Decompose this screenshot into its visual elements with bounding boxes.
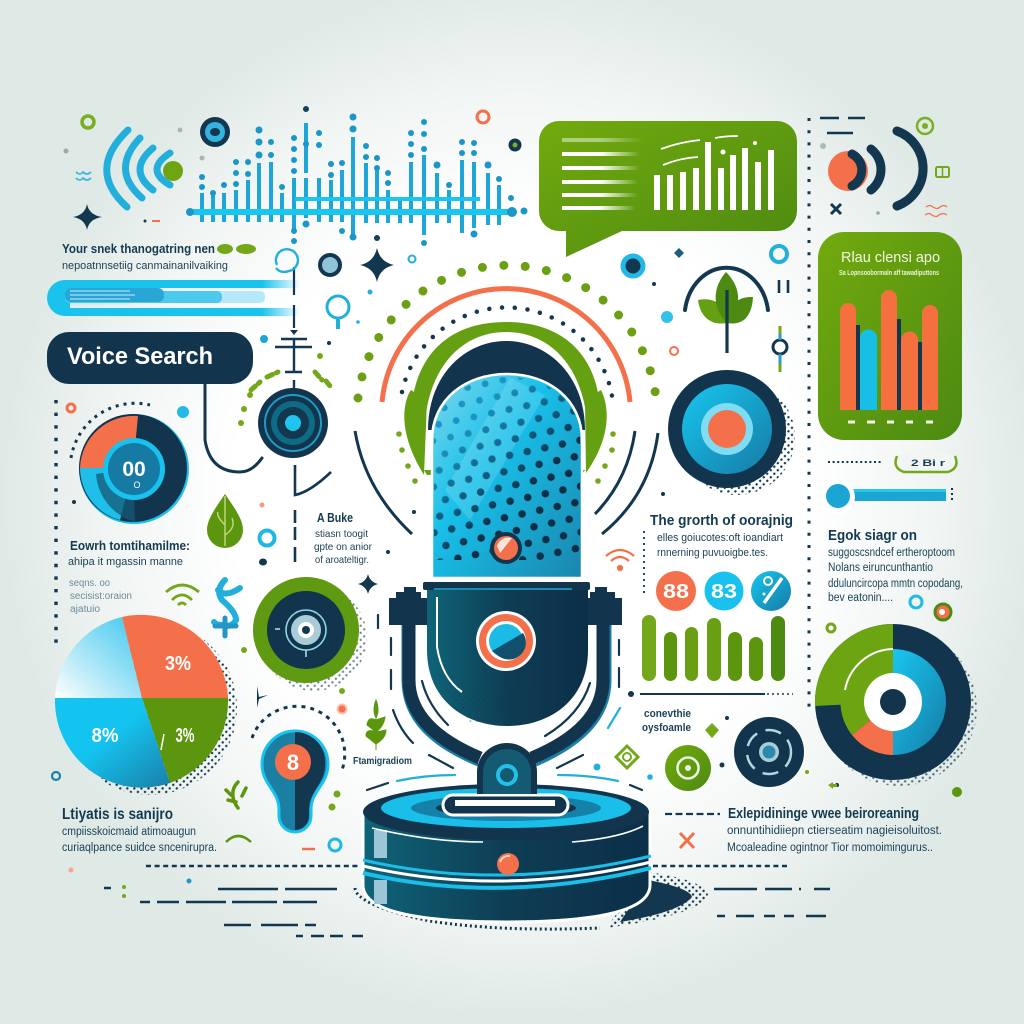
text block: lower right: Mcoaleadine ogintnor Tior momoimingurus.. bbox=[727, 842, 933, 854]
panel: green bar chart bbox=[818, 232, 962, 440]
pie chart bbox=[55, 615, 237, 795]
green crescent bbox=[411, 322, 600, 475]
mic head bbox=[432, 374, 582, 578]
stat circles: 83 bbox=[711, 581, 737, 603]
base plate bbox=[443, 795, 568, 815]
sound arcs bbox=[355, 265, 658, 534]
text block: A Buke: A Buke bbox=[317, 510, 353, 525]
green bar chart bbox=[628, 615, 793, 697]
microphone bbox=[355, 265, 708, 929]
text block: intro: nepoatnnsetiig canmainanilvaiking bbox=[62, 260, 228, 272]
text block: left: ajatuio bbox=[70, 604, 100, 615]
icon: navy sound waves with orange dot bbox=[820, 118, 949, 216]
text block: growth: elles goiucotes:oft ioandiart bbox=[657, 532, 783, 544]
decorative top left icons bbox=[64, 111, 522, 230]
text block: right: dduluncircopa mmtn copodang, bbox=[828, 578, 963, 590]
connector lines and central target bbox=[205, 267, 331, 562]
keyhole badge with number bbox=[252, 706, 345, 832]
text block: left: ahipa it mgassin manne bbox=[68, 556, 183, 568]
text block: left bbox=[68, 538, 190, 615]
body button bbox=[476, 611, 536, 671]
dotted base outline bbox=[355, 888, 600, 929]
dark dome bbox=[428, 341, 585, 430]
small icons around lower left bbox=[52, 686, 346, 898]
icon: plant with label: Ftamigradiom bbox=[353, 755, 412, 767]
text block: lower left bbox=[62, 806, 217, 854]
text block: lower right bbox=[653, 806, 942, 916]
text block: intro bbox=[62, 241, 256, 272]
heading: Voice Search: Voice Search bbox=[67, 343, 213, 370]
speech bubble with bar chart bbox=[539, 121, 797, 257]
text block: intro: Your snek thanogatring nen bbox=[62, 241, 215, 256]
text block: right: suggoscsndcef ertheroptoom bbox=[828, 547, 955, 559]
text block: left: secisist:oraion bbox=[70, 591, 132, 602]
lower middle labels and icons: oysfoamle bbox=[642, 722, 691, 734]
collar bbox=[423, 582, 590, 590]
stat circles bbox=[656, 571, 791, 611]
text block: growth bbox=[644, 512, 793, 597]
base bbox=[363, 812, 650, 922]
knob bbox=[477, 743, 537, 794]
heading: Voice Search bbox=[47, 332, 253, 384]
panel: green bar chart: Sa Lopnsoobormaln aff tawadiputtons bbox=[839, 270, 939, 277]
motion strokes bbox=[367, 615, 642, 790]
mic body bbox=[427, 590, 588, 726]
dotted vertical divider bbox=[808, 118, 810, 708]
dotted vertical rule bbox=[54, 400, 58, 648]
text block: right: Nolans eiruncunthantio bbox=[828, 562, 933, 574]
pie chart: 8% bbox=[92, 725, 119, 747]
text block: growth: The grorth of oorajnig bbox=[650, 512, 793, 529]
text block: growth: rnnerning puvuoigbe.tes. bbox=[657, 547, 768, 559]
donut chart: right bbox=[805, 596, 977, 797]
text block: lower right: onnuntihidiiepn ctierseatim nagieisoluitost. bbox=[727, 825, 942, 837]
text block: A Buke: of aroateltigr. bbox=[315, 554, 369, 566]
small icons around leaf bbox=[623, 246, 787, 496]
label pill and slider: 2 Bi r bbox=[911, 458, 946, 468]
text block: lower left: Ltiyatis is sanijro bbox=[62, 806, 173, 823]
clamps bbox=[389, 587, 427, 625]
lower middle labels and icons: conevthie bbox=[644, 708, 691, 720]
pie chart: 3% bbox=[165, 653, 191, 675]
text block: A Buke: gpte on anior bbox=[314, 541, 372, 553]
text block: right: bev eatonin.... bbox=[828, 592, 893, 604]
text block: lower right: Exlepidininge vwee beiroreaning bbox=[728, 806, 919, 822]
text block: A Buke bbox=[314, 510, 390, 594]
pie chart: 3% bbox=[176, 725, 195, 747]
stat circles: 88 bbox=[663, 581, 689, 603]
panel: green bar chart: Rlau clensi apo bbox=[841, 249, 940, 266]
green target circle bbox=[253, 577, 367, 691]
icon: cyan sound waves with green dot bbox=[107, 130, 183, 207]
waveform chart bbox=[186, 106, 528, 246]
text block: A Buke: stiasn toogit bbox=[315, 528, 368, 540]
donut chart: left bbox=[67, 403, 189, 524]
keyhole badge with number: 8 bbox=[287, 750, 299, 775]
text block: lower left: cmpiisskoicmaid atimoaugun bbox=[62, 826, 196, 838]
icon: leaf under arch bbox=[685, 268, 788, 353]
donut chart: left: O bbox=[133, 480, 141, 490]
text block: right bbox=[828, 527, 963, 604]
lower middle labels and icons bbox=[594, 708, 804, 791]
label pill and slider bbox=[821, 454, 956, 514]
small connector icons bbox=[238, 248, 416, 426]
orange wifi icon bbox=[606, 550, 634, 570]
text block: lower left: curiaqlpance suidce sncenirupra. bbox=[62, 842, 217, 854]
donut chart: left: 00 bbox=[122, 458, 146, 481]
text block: left: seqns. oo bbox=[69, 578, 110, 589]
icon: plant with label bbox=[353, 700, 412, 767]
text block: left: Eowrh tomtihamilme: bbox=[70, 538, 190, 553]
base shadow bbox=[606, 872, 708, 928]
stand yoke bbox=[403, 625, 610, 765]
dashed lines lower left bbox=[104, 866, 363, 936]
big button circle bbox=[668, 370, 795, 495]
head button bbox=[490, 532, 522, 564]
leaf, ring and wifi icons bbox=[166, 494, 274, 653]
text block: right: Egok siagr on bbox=[828, 527, 917, 544]
cyan progress bar bbox=[47, 280, 300, 316]
